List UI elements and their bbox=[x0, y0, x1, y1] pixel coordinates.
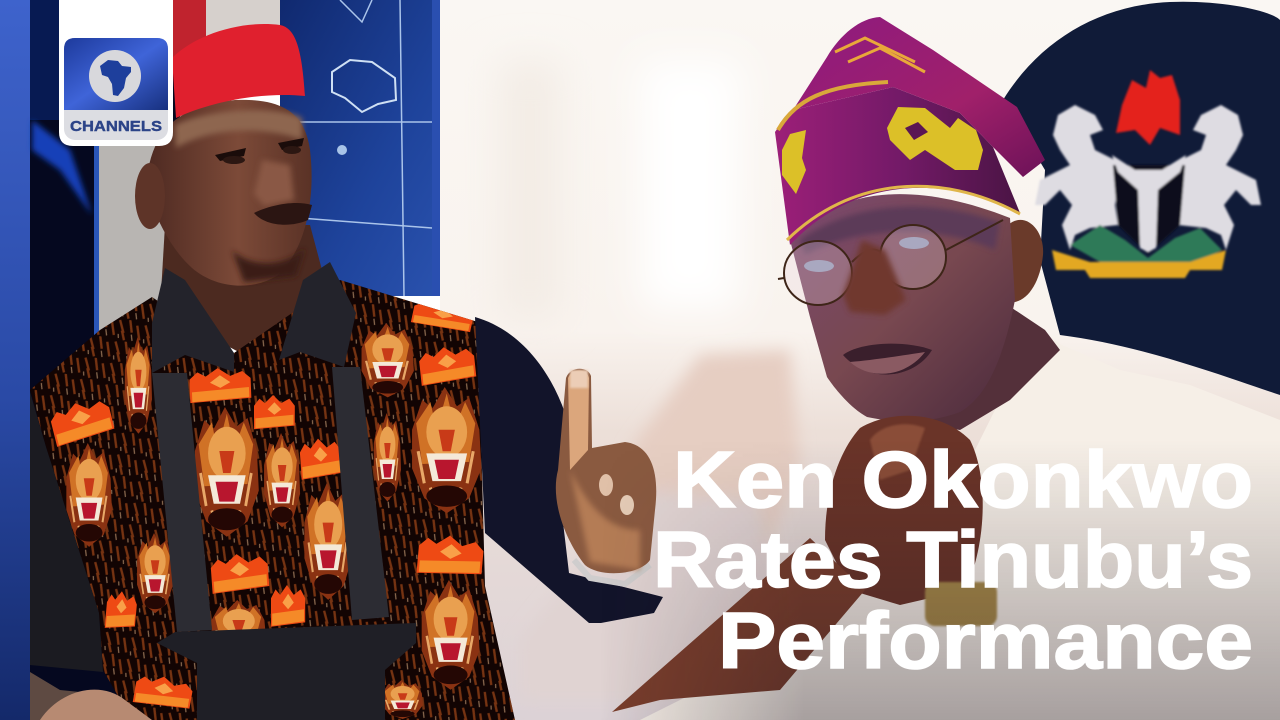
raised hand bbox=[556, 369, 656, 573]
neck bbox=[900, 300, 1060, 430]
red eagle bbox=[1116, 70, 1180, 145]
glasses bbox=[778, 220, 1003, 305]
presenter: Ken Okonkwo bbox=[30, 24, 663, 720]
white robe bbox=[640, 330, 1280, 720]
left sleeve bbox=[30, 392, 103, 672]
headline bbox=[653, 435, 1253, 685]
background: right side studio wash bbox=[440, 0, 1280, 720]
right suspender strip bbox=[332, 367, 389, 620]
coat of arms on chair bbox=[1035, 70, 1261, 278]
apron pocket bbox=[157, 623, 416, 720]
face bbox=[790, 194, 1015, 421]
presenter neck and face bbox=[135, 100, 330, 358]
mouth bbox=[843, 344, 932, 374]
logo globe bbox=[89, 50, 141, 102]
red cap bbox=[172, 24, 305, 118]
emblem centre diamond bbox=[905, 122, 928, 140]
yellow ribbon bbox=[1052, 250, 1226, 278]
left suspender strip bbox=[152, 373, 212, 632]
shield bbox=[1113, 165, 1185, 254]
forearm bbox=[612, 538, 865, 712]
left blue strip bbox=[0, 0, 30, 720]
right horse bbox=[1176, 105, 1261, 250]
bracelet bbox=[574, 560, 650, 584]
right sleeve bbox=[475, 317, 663, 623]
cap band bbox=[775, 87, 1020, 245]
ear bbox=[1008, 220, 1043, 302]
gold cap emblem bbox=[887, 107, 983, 170]
presenter lower hand bbox=[40, 690, 152, 720]
lower dark gradient behind headline bbox=[624, 466, 1280, 720]
left gold emblem bbox=[782, 130, 806, 194]
right collar bbox=[279, 262, 356, 367]
left horse bbox=[1035, 105, 1120, 250]
headline line 3: Performance bbox=[718, 596, 1253, 685]
forehead sheen bbox=[800, 207, 1000, 255]
cap fold top bbox=[793, 17, 1045, 177]
forearm at lower left bbox=[30, 672, 135, 720]
green base bbox=[1070, 225, 1222, 262]
Tinubu figure bbox=[612, 17, 1280, 720]
headline line 1: Ken Okonkwo bbox=[673, 435, 1253, 524]
wristwatch bbox=[925, 582, 997, 626]
eyes bbox=[804, 237, 929, 272]
Channels TV logo bbox=[59, 0, 173, 146]
logo Africa shape bbox=[100, 60, 131, 96]
clasped hands bbox=[825, 416, 983, 605]
left collar bbox=[152, 268, 234, 373]
presidential chair back bbox=[1003, 2, 1280, 395]
patterned vest bbox=[30, 270, 530, 720]
nose bbox=[843, 240, 906, 315]
logo wordmark: CHANNELS bbox=[70, 118, 162, 135]
headline line 2: Rates Tinubu’s bbox=[653, 515, 1253, 604]
studio backdrop behind presenter bbox=[30, 0, 440, 720]
